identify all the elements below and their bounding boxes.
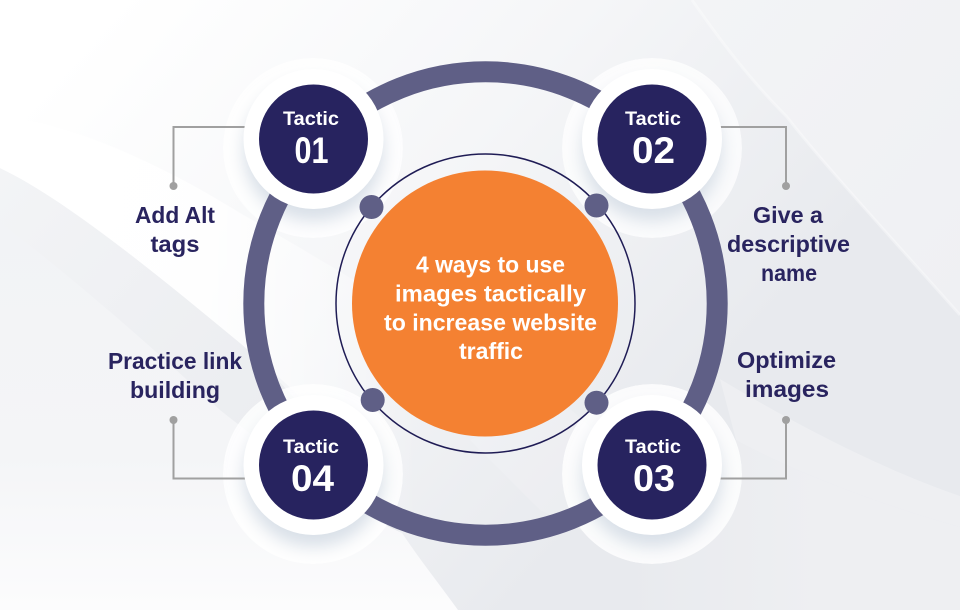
label: give a descriptive name — [727, 202, 850, 286]
badge: tactic 01: 01 — [294, 130, 328, 171]
label: optimize images: Optimize — [737, 347, 836, 373]
badge: tactic 03: Tactic — [625, 436, 681, 458]
center circle — [352, 170, 618, 436]
label: add alt tags: tags — [150, 231, 200, 257]
label: give a descriptive name: Give a — [753, 202, 823, 228]
node dots — [360, 194, 608, 415]
badge: tactic 04 — [244, 395, 384, 535]
center circle: traffic — [459, 338, 523, 364]
label: give a descriptive name: name — [761, 260, 817, 286]
badge: tactic 02: 02 — [632, 130, 675, 171]
inner thin ring — [336, 154, 635, 453]
halo: tactic 01 — [240, 130, 385, 222]
halo: tactic 02 — [562, 58, 742, 238]
badge: tactic 03 — [582, 395, 722, 535]
badge: tactic 01 — [244, 69, 384, 209]
center circle: images tactically — [395, 280, 586, 306]
center circle: to increase website — [384, 310, 597, 336]
badge: tactic 04: 04 — [291, 458, 334, 499]
center circle: 4 ways to use — [416, 252, 565, 278]
halo: tactic 03 — [562, 384, 742, 564]
badge: tactic 02: Tactic — [625, 108, 681, 130]
badge: tactic 01: Tactic — [283, 108, 339, 130]
outer ring — [254, 72, 717, 535]
label: add alt tags — [135, 202, 215, 257]
connector: tactic 04 — [170, 416, 246, 478]
label: practice link building: building — [130, 377, 220, 403]
label: add alt tags: Add Alt — [135, 202, 215, 228]
badge: tactic 03: 03 — [633, 458, 675, 499]
label: optimize images: images — [745, 376, 829, 402]
badge: tactic 02 — [582, 69, 722, 209]
label: practice link building — [108, 348, 242, 403]
badge: tactic 04: Tactic — [283, 436, 339, 458]
label: give a descriptive name: descriptive — [727, 231, 850, 257]
label: practice link building: Practice link — [108, 348, 242, 374]
connector: tactic 03 — [720, 416, 790, 478]
label: optimize images — [737, 347, 836, 402]
halo: tactic 04 — [224, 388, 403, 550]
connector: tactic 01 — [170, 127, 246, 190]
connector: tactic 02 — [720, 127, 790, 190]
